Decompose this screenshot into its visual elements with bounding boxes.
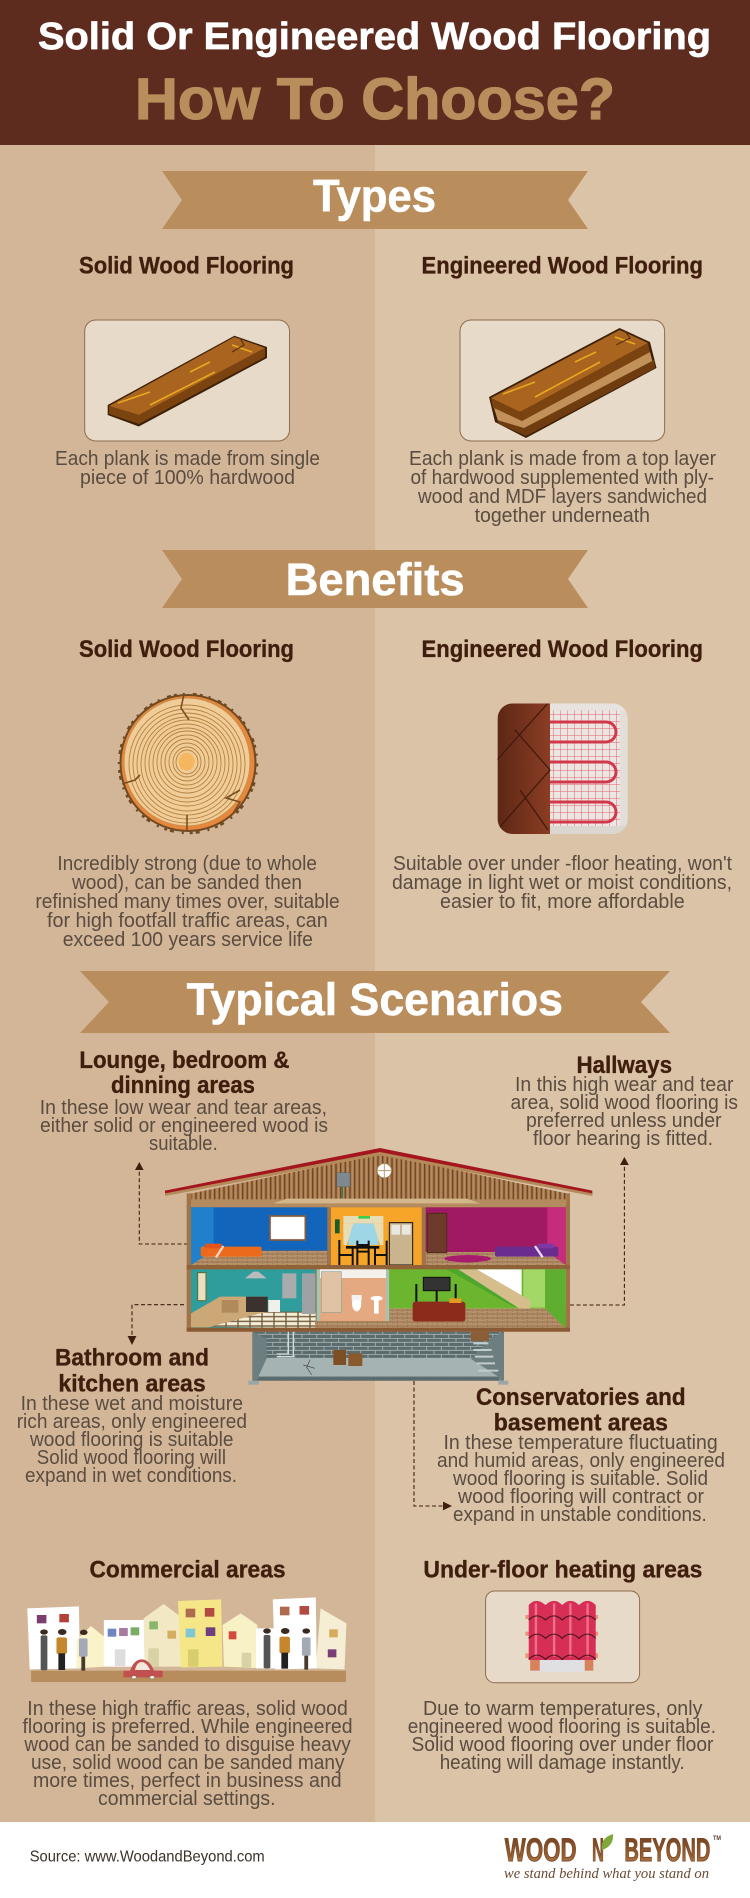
background: left column xyxy=(0,145,375,1822)
callout: lounge, bedroom and dinning: In these low wear and tear areas, xyxy=(40,1097,327,1119)
heading: commercial areas: Commercial areas xyxy=(90,1557,286,1584)
callout: bathroom and kitchen: Solid wood flooring will xyxy=(37,1447,226,1469)
arrow: to lounge callout xyxy=(135,1162,188,1244)
arrow: to hallways callout xyxy=(570,1157,629,1305)
callout: hallways: Hallways xyxy=(576,1052,672,1079)
roof xyxy=(165,1148,592,1195)
arrow: to conservatories callout xyxy=(414,1381,452,1510)
panel: solid benefits xyxy=(35,636,340,951)
banner: Typical Scenarios xyxy=(80,971,670,1033)
text: commercial description: more times, perfect in business and xyxy=(33,1770,342,1792)
illustration: house cross-section xyxy=(165,1148,592,1385)
text: engineered benefits description: easier to fit, more affordable xyxy=(440,891,685,913)
room: living xyxy=(389,1269,566,1328)
footer band xyxy=(0,1822,750,1898)
callout: conservatories and basement: wood flooring is suitable. Solid xyxy=(452,1468,708,1490)
text: engineered description: wood and MDF layers sandwiched xyxy=(417,486,707,508)
room: bathroom xyxy=(315,1269,390,1328)
callout: bathroom and kitchen: rich areas, only engineered xyxy=(17,1411,247,1433)
attic xyxy=(191,1154,567,1207)
text: heating description: engineered wood flooring is suitable. xyxy=(408,1716,716,1738)
text: engineered description: Each plank is made from a top layer xyxy=(409,448,716,470)
text: solid description xyxy=(55,448,320,489)
house walls xyxy=(187,1193,570,1332)
text: commercial description: wood can be sanded to disguise heavy xyxy=(23,1734,351,1756)
text: engineered benefits description: damage in light wet or moist conditions, xyxy=(392,872,732,894)
banner: Types: Types xyxy=(313,170,436,222)
logo: Wood N' Beyond: N xyxy=(592,1832,604,1868)
header panel xyxy=(0,0,750,145)
panel: engineered wood type xyxy=(409,252,716,527)
text: engineered description: of hardwood supplemented with ply- xyxy=(410,467,714,489)
text: solid benefits description: refinished many times over, suitable xyxy=(35,891,340,913)
text: commercial description: commercial settings. xyxy=(98,1788,276,1810)
logo: Wood N' Beyond: WOOD xyxy=(505,1832,577,1868)
text: engineered description: together underneath xyxy=(475,505,650,527)
callout: bathroom and kitchen xyxy=(17,1345,247,1487)
text: solid description: Each plank is made from single xyxy=(55,448,320,470)
callout: bathroom and kitchen: kitchen areas xyxy=(58,1371,206,1398)
panel: engineered benefits xyxy=(392,636,732,913)
room: kitchen xyxy=(191,1269,316,1328)
callout: hallways xyxy=(510,1052,738,1150)
text: commercial description: use, solid wood can be sanded many xyxy=(31,1752,344,1774)
text: solid benefits description: for high footfall traffic areas, can xyxy=(47,910,328,932)
banner: Types xyxy=(162,170,588,229)
text: engineered benefits description xyxy=(392,853,732,913)
text: solid benefits description: wood), can be sanded then xyxy=(71,872,302,894)
callout: conservatories and basement: expand in unstable conditions. xyxy=(453,1504,707,1526)
source line: Source: www.WoodandBeyond.com xyxy=(30,1848,265,1866)
card: engineered plank xyxy=(460,320,665,441)
text: solid benefits description: exceed 100 years service life xyxy=(63,929,313,951)
people xyxy=(40,1628,311,1671)
heading: engineered benefits: Engineered Wood Flooring xyxy=(422,636,703,663)
logo: Wood N' Beyond xyxy=(504,1832,721,1882)
callout: hallways: preferred unless under xyxy=(526,1110,722,1132)
callout: hallways: In this high wear and tear xyxy=(515,1074,734,1096)
text: commercial description xyxy=(22,1698,353,1810)
callout: conservatories and basement: In these temperature fluctuating xyxy=(444,1432,718,1454)
callout: hallways: floor hearing is fitted. xyxy=(533,1128,713,1150)
callout: conservatories and basement xyxy=(437,1384,725,1526)
heading: under-floor heating: Under-floor heating areas xyxy=(423,1557,702,1584)
callout: conservatories and basement: Conservatories and xyxy=(476,1384,686,1411)
callout: conservatories and basement: wood flooring will contract or xyxy=(457,1486,704,1508)
icon: leaf xyxy=(602,1834,613,1850)
panel: solid wood type xyxy=(55,252,320,489)
text: solid benefits description xyxy=(35,853,340,951)
callout: lounge, bedroom and dinning: suitable. xyxy=(149,1133,218,1155)
text: commercial description: In these high traffic areas, solid wood xyxy=(27,1698,348,1720)
callout: conservatories and basement: basement areas xyxy=(494,1410,668,1437)
text: solid benefits description: Incredibly strong (due to whole xyxy=(57,853,317,875)
icon: tree ring slice xyxy=(119,694,257,833)
bottom beam xyxy=(187,1328,570,1332)
banner: Typical Scenarios: Typical Scenarios xyxy=(187,974,563,1025)
text: engineered benefits description: Suitable over under -floor heating, won't xyxy=(393,853,732,875)
text: heating description: heating will damage instantly. xyxy=(440,1752,685,1774)
logo: Wood N' Beyond: TM xyxy=(713,1836,721,1842)
basement xyxy=(248,1332,508,1385)
banner: Benefits xyxy=(162,550,588,608)
subtitle: How To Choose? xyxy=(135,67,615,132)
ground xyxy=(31,1671,346,1682)
car xyxy=(123,1659,163,1679)
text: solid description: piece of 100% hardwood xyxy=(80,467,295,489)
room: magenta bedroom xyxy=(426,1207,566,1265)
text: heating description: Solid wood flooring over under floor xyxy=(412,1734,714,1756)
logo: Wood N' Beyond: we stand behind what you stand on xyxy=(504,1866,709,1882)
arrow: to bathroom callout xyxy=(128,1305,184,1345)
illustration: city street xyxy=(27,1597,346,1682)
heading: solid benefits: Solid Wood Flooring xyxy=(79,636,294,663)
callout: bathroom and kitchen: wood flooring is suitable xyxy=(29,1429,234,1451)
icon: under-floor heating tile xyxy=(497,703,628,834)
callout: lounge, bedroom and dinning xyxy=(40,1047,328,1155)
panel: commercial areas xyxy=(22,1557,353,1810)
background: right column xyxy=(375,145,750,1822)
room: orange dining xyxy=(331,1207,422,1265)
callout: lounge, bedroom and dinning: either solid or engineered wood is xyxy=(40,1115,328,1137)
callout: bathroom and kitchen: Bathroom and xyxy=(55,1345,209,1372)
card: solid plank xyxy=(85,320,290,441)
text: engineered description xyxy=(409,448,716,527)
title: Solid Or Engineered Wood Flooring xyxy=(38,16,711,58)
heading: solid wood flooring: Solid Wood Flooring xyxy=(79,252,294,280)
text: heating description xyxy=(408,1698,716,1774)
callout: bathroom and kitchen: expand in wet conditions. xyxy=(25,1465,237,1487)
panel: under-floor heating areas xyxy=(408,1557,716,1774)
room: blue bedroom xyxy=(191,1207,327,1265)
callout: bathroom and kitchen: In these wet and moisture xyxy=(21,1393,243,1415)
card: heating tiles xyxy=(486,1591,640,1683)
floor beam xyxy=(187,1265,570,1269)
text: heating description: Due to warm temperatures, only xyxy=(423,1698,702,1720)
callout: lounge, bedroom and dinning: Lounge, bedroom & xyxy=(79,1047,289,1074)
text: commercial description: flooring is preferred. While engineered xyxy=(22,1716,353,1738)
callout: hallways: area, solid wood flooring is xyxy=(510,1092,738,1114)
callout: lounge, bedroom and dinning: dinning areas xyxy=(111,1072,255,1099)
callout: conservatories and basement: and humid areas, only engineered xyxy=(437,1450,725,1472)
heading: engineered wood flooring: Engineered Wood Flooring xyxy=(422,252,703,280)
banner: Benefits: Benefits xyxy=(286,554,465,605)
